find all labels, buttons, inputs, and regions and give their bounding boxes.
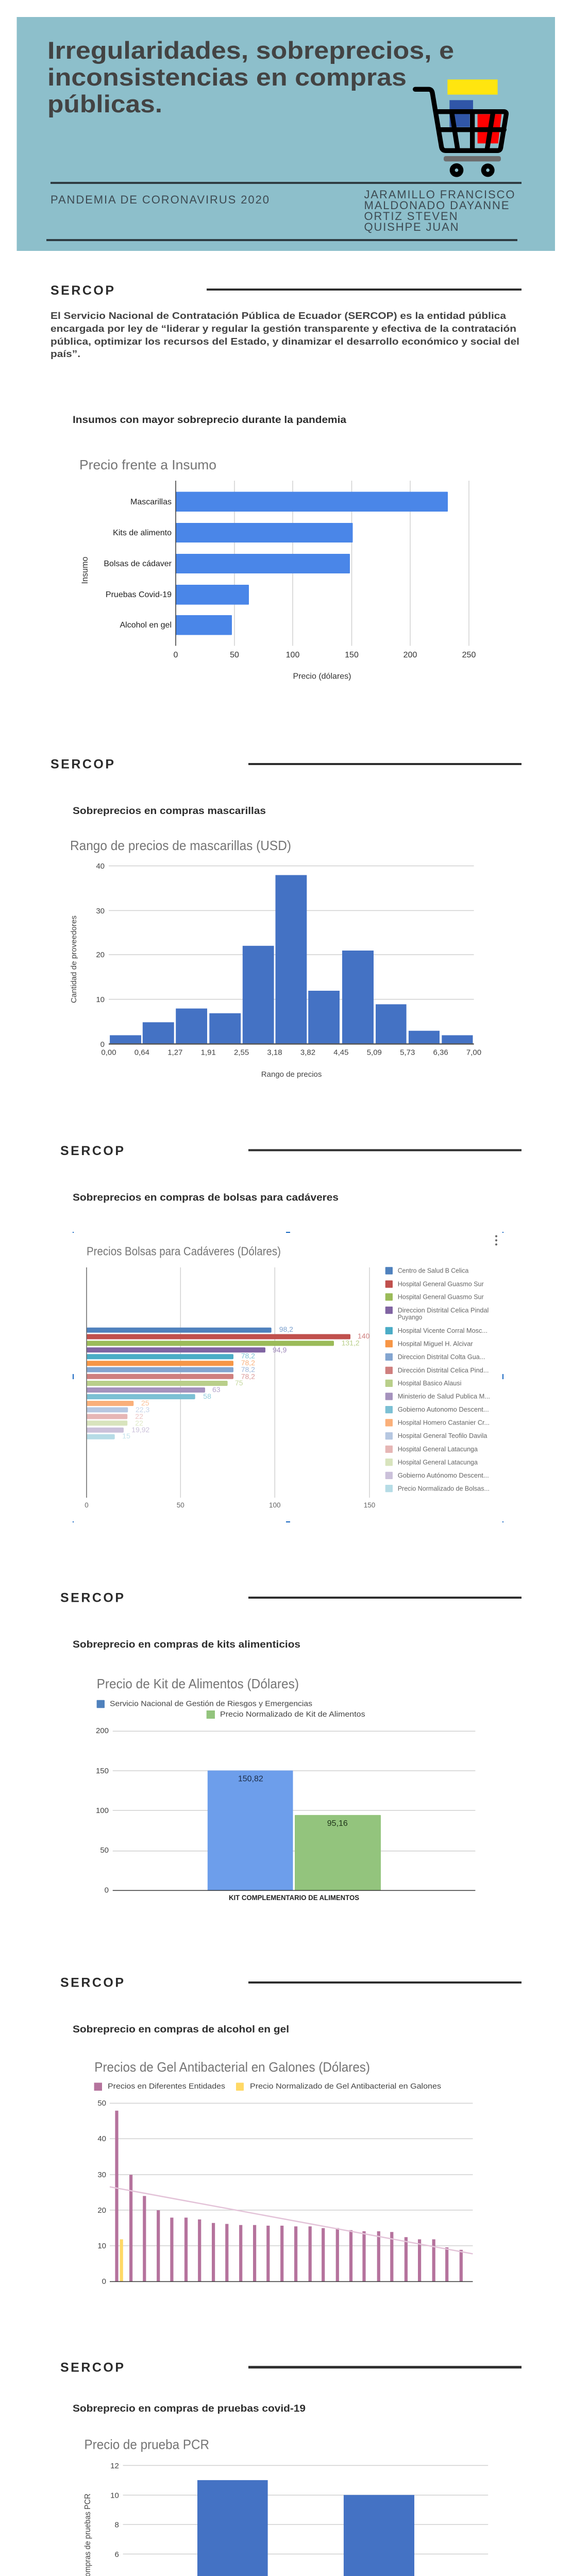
header banner bbox=[16, 17, 555, 251]
bar chart: precios bolsas para cadáveres: 15 bbox=[122, 1432, 130, 1440]
section intro: SERCOP bbox=[51, 283, 521, 359]
legend bbox=[385, 1267, 490, 1492]
bar chart: precio de kit de alimentos: Precio de Kit de Alimentos (Dólares) bbox=[97, 1676, 299, 1691]
legend: Gobierno Autónomo Descent... bbox=[398, 1471, 489, 1479]
histogram: rango de precios de mascarillas: 3,18 bbox=[267, 1048, 282, 1057]
heading: insumos: Insumos con mayor sobreprecio durante la pandemia bbox=[73, 415, 346, 426]
histogram: rango de precios de mascarillas: 20 bbox=[96, 951, 105, 959]
legend: Hospital General Latacunga bbox=[398, 1445, 478, 1453]
bar chart: precios bolsas para cadáveres: 58 bbox=[203, 1392, 211, 1400]
bar chart: precios bolsas para cadáveres: 78,2 bbox=[241, 1359, 255, 1367]
bar chart: precios bolsas para cadáveres: 140 bbox=[358, 1332, 370, 1340]
bar chart: precios bolsas para cadáveres: 25 bbox=[141, 1399, 149, 1407]
authors: ORTIZ STEVEN bbox=[364, 210, 458, 223]
bar chart: precio frente a insumo: 200 bbox=[403, 651, 417, 659]
title: públicas. bbox=[47, 90, 162, 117]
bar chart: precios bolsas para cadáveres: 150 bbox=[364, 1501, 375, 1509]
histogram: rango de precios de mascarillas: 6,36 bbox=[433, 1048, 448, 1057]
legend: Hospital General Guasmo Sur bbox=[398, 1280, 484, 1288]
legend: Hospital Vicente Corral Mosc... bbox=[398, 1327, 487, 1334]
legend: Precio Normalizado de Gel Antibacterial en Galones bbox=[250, 2082, 441, 2091]
bar chart: precios bolsas para cadáveres: 63 bbox=[212, 1385, 221, 1394]
bar chart: precio frente a insumo: 50 bbox=[230, 651, 239, 659]
histogram: rango de precios de mascarillas bbox=[70, 838, 481, 1079]
bar chart: precios de gel antibacterial: 0 bbox=[102, 2277, 106, 2286]
bar chart: precio de kit de alimentos: 0 bbox=[105, 1886, 109, 1895]
bar chart: precios de gel antibacterial: Precios de Gel Antibacterial en Galones (Dólares) bbox=[94, 2059, 370, 2075]
bar chart: precios bolsas para cadáveres bbox=[73, 1232, 503, 1522]
bar chart: precio frente a insumo: 250 bbox=[462, 651, 476, 659]
legend bbox=[97, 1700, 365, 1719]
histogram: rango de precios de mascarillas: 2,55 bbox=[234, 1048, 249, 1057]
bar chart: precios bolsas para cadáveres: 78,2 bbox=[241, 1372, 255, 1381]
bar chart: precio de kit de alimentos bbox=[96, 1676, 475, 1902]
legend: Precio Normalizado de Bolsas... bbox=[398, 1484, 490, 1492]
legend: Hospital Basico Alausi bbox=[398, 1379, 462, 1387]
intro paragraph bbox=[51, 311, 519, 359]
bar chart: precio frente a insumo: Kits de alimento bbox=[113, 529, 172, 537]
histogram: rango de precios de mascarillas: Rango de precios bbox=[261, 1070, 322, 1079]
histogram: rango de precios de mascarillas: 3,82 bbox=[300, 1048, 315, 1057]
authors: MALDONADO DAYANNE bbox=[364, 199, 509, 212]
bar chart: precios bolsas para cadáveres: 100 bbox=[269, 1501, 281, 1509]
intro paragraph: país”. bbox=[51, 349, 80, 359]
histogram: rango de precios de mascarillas: 4,45 bbox=[333, 1048, 349, 1057]
bar chart: precios bolsas para cadáveres: 78,2 bbox=[241, 1352, 255, 1360]
subtitle: PANDEMIA DE CORONAVIRUS 2020 bbox=[51, 193, 269, 206]
histogram: rango de precios de mascarillas: 10 bbox=[96, 995, 105, 1004]
intro paragraph: encargada por ley de “liderar y regular la gestión transparente y efectiva de la contratación bbox=[51, 324, 516, 334]
histogram: rango de precios de mascarillas: 0 bbox=[100, 1040, 105, 1049]
authors: JARAMILLO FRANCISCO bbox=[364, 188, 514, 201]
intro paragraph: pública, optimizar los recursos del Estado, y dinamizar el desarrollo económico y social del bbox=[51, 336, 519, 347]
heading: pruebas: Sobreprecio en compras de pruebas covid-19 bbox=[73, 2403, 306, 2414]
bar chart: precio de kit de alimentos: 150 bbox=[96, 1767, 109, 1775]
legend: Direccion Distrital Celica Pindal bbox=[398, 1306, 489, 1314]
title bbox=[47, 37, 454, 117]
legend: Hospital General Latacunga bbox=[398, 1458, 478, 1466]
bar chart: precios de gel antibacterial: 40 bbox=[97, 2134, 106, 2143]
title: inconsistencias en compras bbox=[47, 63, 407, 91]
histogram: precio de prueba PCR: 8 bbox=[114, 2520, 119, 2530]
bar chart: precios de gel antibacterial bbox=[94, 2059, 473, 2286]
bar chart: precio frente a insumo: 100 bbox=[286, 651, 299, 659]
bar chart: precios bolsas para cadáveres: 94,9 bbox=[273, 1346, 287, 1354]
bar chart: precios bolsas para cadáveres: 0 bbox=[85, 1501, 89, 1509]
section header: SERCOP alcohol: SERCOP bbox=[60, 1975, 124, 1990]
authors: QUISHPE JUAN bbox=[364, 221, 459, 233]
authors bbox=[364, 188, 514, 233]
legend: Ministerio de Salud Publica M... bbox=[398, 1393, 490, 1400]
legend: Precios en Diferentes Entidades bbox=[108, 2082, 225, 2091]
bar chart: precio frente a insumo: 0 bbox=[174, 651, 178, 659]
legend: Centro de Salud B Celica bbox=[398, 1267, 469, 1275]
heading: SERCOP bbox=[51, 283, 114, 298]
histogram: rango de precios de mascarillas: 40 bbox=[96, 862, 105, 871]
histogram: precio de prueba PCR: 10 bbox=[110, 2492, 119, 2500]
histogram: rango de precios de mascarillas: 0,64 bbox=[134, 1048, 149, 1057]
bar chart: precios bolsas para cadáveres: 131,2 bbox=[342, 1339, 360, 1347]
bar chart: precio frente a insumo: Bolsas de cádaver bbox=[104, 560, 172, 568]
histogram: precio de prueba PCR: Precio de prueba PCR bbox=[85, 2437, 209, 2452]
heading: alcohol: Sobreprecio en compras de alcohol en gel bbox=[73, 2024, 289, 2035]
bar chart: precio de kit de alimentos: 100 bbox=[96, 1806, 109, 1815]
histogram: precio de prueba PCR: 12 bbox=[110, 2462, 119, 2470]
legend: Gobierno Autonomo Descent... bbox=[398, 1405, 489, 1413]
bar chart: precio frente a insumo: Insumo bbox=[80, 556, 90, 584]
histogram: rango de precios de mascarillas: 0,00 bbox=[101, 1048, 116, 1057]
bar chart: precio frente a insumo: Pruebas Covid-19 bbox=[106, 590, 172, 599]
trend line bbox=[110, 2187, 473, 2254]
legend: Puyango bbox=[398, 1313, 422, 1321]
heading: kits: Sobreprecio en compras de kits alimenticios bbox=[73, 1639, 300, 1650]
histogram: rango de precios de mascarillas: 7,00 bbox=[466, 1048, 481, 1057]
legend: Servicio Nacional de Gestión de Riesgos y Emergencias bbox=[110, 1700, 312, 1708]
histogram: rango de precios de mascarillas: 1,91 bbox=[201, 1048, 216, 1057]
bar chart: precio de kit de alimentos: KIT COMPLEMENTARIO DE ALIMENTOS bbox=[229, 1893, 359, 1902]
bar chart: precios bolsas para cadáveres: 19,92 bbox=[131, 1426, 150, 1434]
bar chart: precio de kit de alimentos: 50 bbox=[100, 1846, 109, 1855]
legend: Hospital General Teofilo Davila bbox=[398, 1432, 487, 1439]
section header: SERCOP mascarillas: SERCOP bbox=[51, 757, 114, 771]
bar chart: precio frente a insumo: Alcohol en gel bbox=[120, 621, 172, 630]
section header: SERCOP bolsas: SERCOP bbox=[60, 1144, 124, 1158]
bar chart: precio frente a insumo bbox=[79, 457, 476, 681]
bar chart: precios bolsas para cadáveres: 75 bbox=[235, 1379, 243, 1387]
icon: menu dots bbox=[495, 1235, 497, 1246]
legend: Direccion Distrital Colta Gua... bbox=[398, 1353, 485, 1361]
bar chart: precios bolsas para cadáveres: Precios Bolsas para Cadáveres (Dólares) bbox=[87, 1245, 281, 1258]
bar chart: precio frente a insumo: Precio frente a Insumo bbox=[79, 457, 216, 472]
legend bbox=[94, 2082, 441, 2091]
bar chart: precios bolsas para cadáveres: 50 bbox=[177, 1501, 184, 1509]
legend: Hospital General Guasmo Sur bbox=[398, 1293, 484, 1300]
legend: Precio Normalizado de Kit de Alimentos bbox=[220, 1710, 365, 1719]
bar chart: precios de gel antibacterial: 10 bbox=[97, 2242, 106, 2250]
legend: Dirección Distrital Celica Pind... bbox=[398, 1366, 489, 1374]
legend: Hospital Homero Castanier Cr... bbox=[398, 1419, 490, 1427]
histogram: precio de prueba PCR bbox=[83, 2437, 500, 2576]
intro paragraph: El Servicio Nacional de Contratación Pública de Ecuador (SERCOP) es la entidad pública bbox=[51, 311, 507, 321]
section header: SERCOP pruebas: SERCOP bbox=[60, 2361, 124, 2375]
bar chart: precio de kit de alimentos: 200 bbox=[96, 1726, 109, 1735]
histogram: rango de precios de mascarillas: Rango de precios de mascarillas (USD) bbox=[70, 838, 291, 853]
bar chart: precio frente a insumo: 150 bbox=[345, 651, 359, 659]
bar chart: precio frente a insumo: Mascarillas bbox=[130, 498, 172, 506]
bar chart: precios bolsas para cadáveres: 78,2 bbox=[241, 1365, 255, 1374]
bar chart: precio de kit de alimentos: 150,82 bbox=[238, 1775, 263, 1784]
title: Irregularidades, sobreprecios, e bbox=[47, 37, 454, 64]
bar chart: precio frente a insumo: Precio (dólares) bbox=[293, 672, 351, 681]
bar chart: precios bolsas para cadáveres: 98,2 bbox=[279, 1325, 293, 1333]
heading: bolsas: Sobreprecios en compras de bolsas para cadáveres bbox=[73, 1192, 339, 1204]
bar chart: precios bolsas para cadáveres: 22 bbox=[135, 1412, 143, 1420]
histogram: rango de precios de mascarillas: 30 bbox=[96, 907, 105, 916]
icon: shopping cart bbox=[415, 79, 506, 177]
bar chart: precios de gel antibacterial: 50 bbox=[97, 2099, 106, 2108]
histogram: rango de precios de mascarillas: 5,09 bbox=[367, 1048, 382, 1057]
bar chart: precios de gel antibacterial: 30 bbox=[97, 2171, 106, 2179]
section header: SERCOP kits: SERCOP bbox=[60, 1591, 124, 1605]
bar chart: precios bolsas para cadáveres: 22,3 bbox=[136, 1405, 149, 1414]
legend: Hospital Miguel H. Alcivar bbox=[398, 1340, 473, 1348]
bar chart: precio de kit de alimentos: 95,16 bbox=[327, 1819, 348, 1828]
bar chart: precios de gel antibacterial: 20 bbox=[97, 2206, 106, 2215]
histogram: precio de prueba PCR: 6 bbox=[114, 2550, 119, 2559]
heading: mascarillas: Sobreprecios en compras mascarillas bbox=[73, 806, 266, 817]
histogram: rango de precios de mascarillas: Cantidad de proveedores bbox=[70, 916, 78, 1003]
bar chart: precios bolsas para cadáveres: 22 bbox=[135, 1419, 143, 1427]
histogram: rango de precios de mascarillas: 1,27 bbox=[167, 1048, 182, 1057]
histogram: rango de precios de mascarillas: 5,73 bbox=[400, 1048, 415, 1057]
